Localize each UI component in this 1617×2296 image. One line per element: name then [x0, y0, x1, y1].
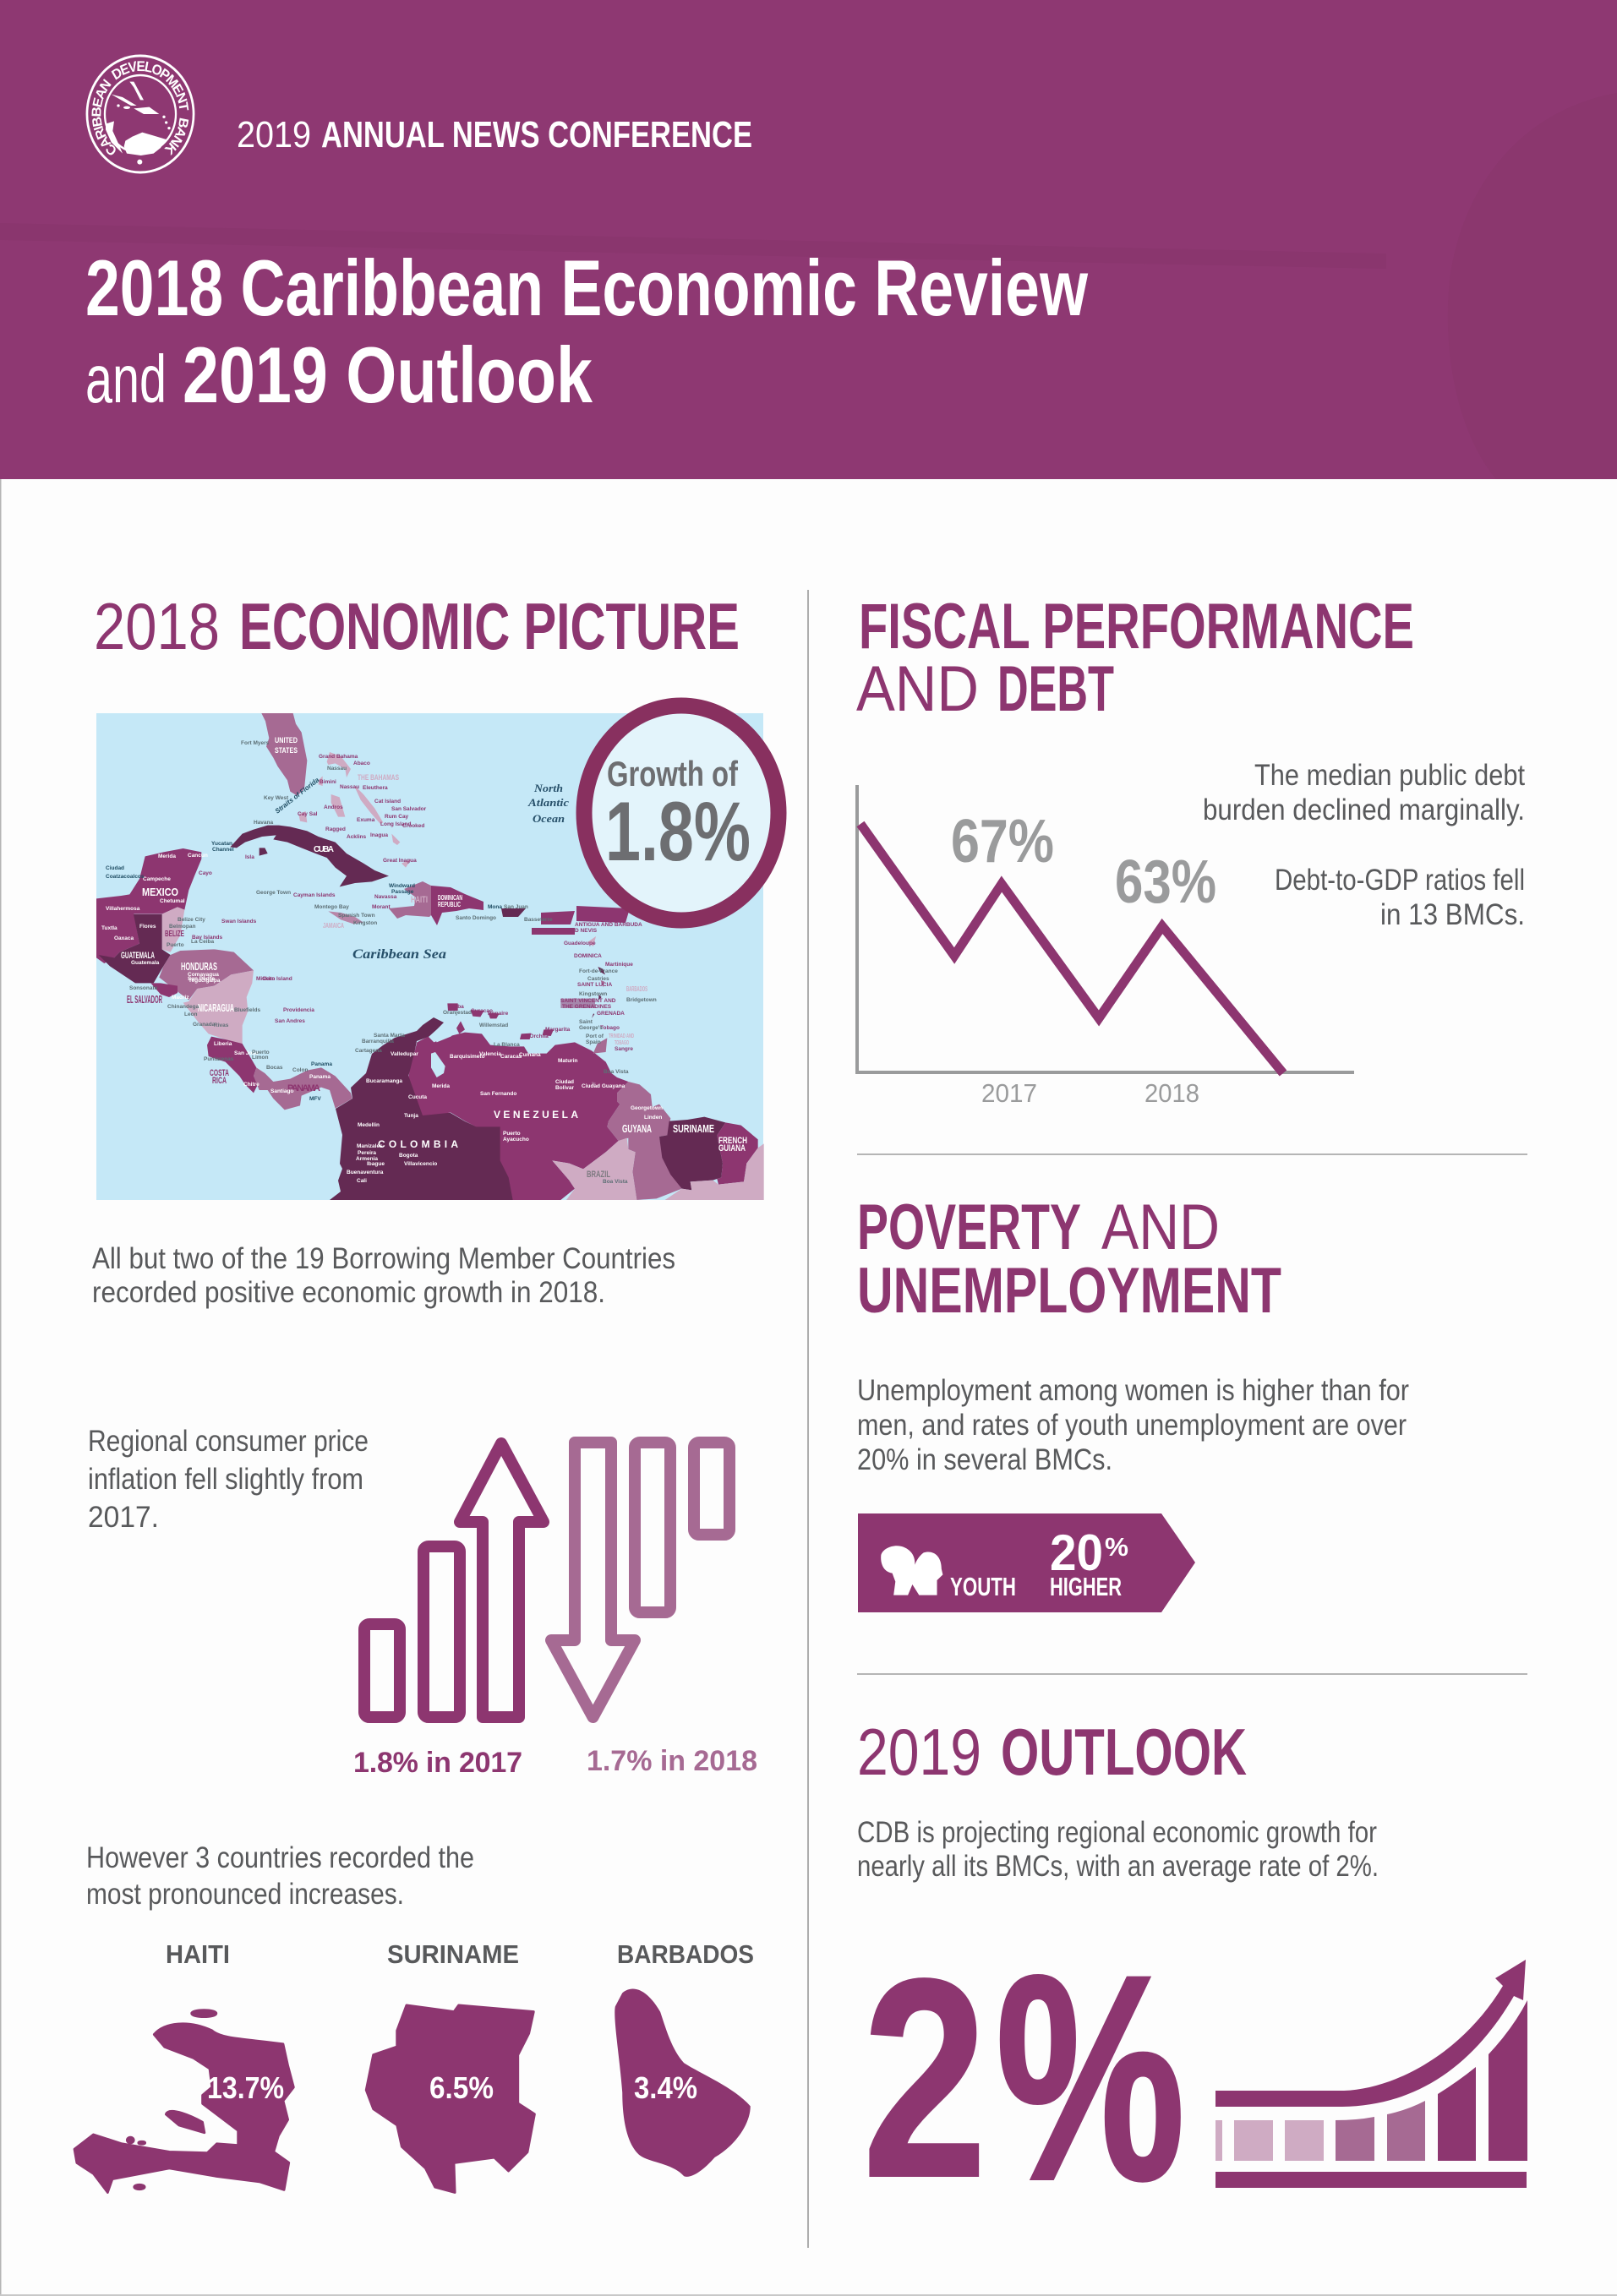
heading: fiscal performance and debt: [856, 591, 1414, 725]
map labels: countries: MEXICO: [142, 886, 178, 898]
map labels: cities and small islands: Pereira: [358, 1150, 376, 1156]
map labels: cities and small islands: Georgetown: [631, 1105, 663, 1111]
heading: poverty and unemployment: POVERTY: [857, 1192, 1081, 1263]
map labels: cities and small islands: Liberia: [214, 1041, 232, 1047]
map labels: cities and small islands: Bluefields: [234, 1007, 260, 1013]
map labels: cities and small islands: Ayacucho: [503, 1137, 529, 1143]
map labels: cities and small islands: Rivas: [214, 1023, 229, 1028]
map land: Colombia: [330, 1017, 513, 1200]
map labels: countries: GUYANA: [622, 1122, 652, 1135]
map labels: countries: FRENCH: [718, 1136, 747, 1146]
map labels: cities and small islands: Crooked: [402, 823, 424, 829]
heading: poverty and unemployment: UNEMPLOYMENT: [857, 1255, 1281, 1327]
map labels: cities and small islands: Margarita: [545, 1027, 571, 1033]
map labels: countries: COLOMBIA: [378, 1138, 458, 1150]
panel: Barbados: 3.4%: [634, 2070, 697, 2105]
map labels: cities and small islands: Guadeloupe: [564, 941, 596, 946]
map labels: cities and small islands: Tegucigalpa: [188, 978, 221, 984]
text: median debt: burden declined marginally.: [1203, 794, 1525, 826]
header kicker: [237, 114, 752, 155]
map labels: cities and small islands: Montego Bay: [314, 904, 349, 910]
map labels: cities and small islands: Yucatan: [211, 841, 232, 847]
map labels: countries: BELIZE: [165, 930, 184, 939]
map labels: cities and small islands: Curacao: [471, 1008, 493, 1014]
map labels: cities and small islands: THE GRENADINES: [562, 1004, 612, 1010]
text: unemployment: [857, 1374, 1409, 1476]
map labels: cities and small islands: ANTIGUA AND BARBUDA: [575, 922, 642, 928]
map labels: cities and small islands: Puerto: [167, 942, 184, 948]
map labels: cities and small islands: Rum Cay: [385, 814, 409, 820]
map labels: cities and small islands: Puntarenas: [204, 1056, 234, 1062]
map labels: countries: RICA: [212, 1076, 227, 1086]
map labels: cities and small islands: Belize City: [178, 917, 205, 923]
text: CDB projection: CDB is projecting regional economic growth for: [857, 1816, 1377, 1849]
map labels: cities and small islands: Boa Vista: [603, 1179, 628, 1185]
heading: 2019 outlook: 2019: [857, 1715, 981, 1789]
text: inflation: 2017.: [88, 1501, 159, 1534]
text: CDB projection: [857, 1816, 1379, 1883]
map labels: cities and small islands: Santo Domingo: [456, 915, 496, 921]
map labels: cities and small islands: Navassa: [374, 894, 397, 900]
panel: Suriname: SURINAME: [387, 1939, 519, 1969]
map labels: cities and small islands: Madriz: [172, 995, 189, 1001]
map labels: cities and small islands: Cay Sal: [298, 811, 318, 817]
map labels: countries: REPUBLIC: [438, 901, 461, 908]
map labels: cities and small islands: Key West: [264, 795, 289, 801]
big number: 2%: [862, 1916, 1185, 2241]
map labels: cities and small islands: Bonaire: [488, 1011, 509, 1017]
map labels: cities and small islands: Manizales: [357, 1143, 383, 1149]
label: 1.8% in 2017: 1.8% in 2017: [353, 1747, 522, 1779]
map labels: cities and small islands: Long Island: [380, 821, 411, 827]
map labels: cities and small islands: Bocas: [266, 1065, 283, 1071]
map labels: cities and small islands: [101, 740, 663, 1185]
map labels: cities and small islands: Barranquilla: [362, 1039, 394, 1044]
panel: Haiti: HAITI: [166, 1939, 230, 1969]
map labels: seas: North: [533, 783, 563, 794]
heading: fiscal performance and debt: AND: [856, 653, 979, 725]
map labels: cities and small islands: Tuxtla: [101, 925, 117, 931]
heading: poverty and unemployment: [857, 1192, 1281, 1327]
axis label: 2018: 2018: [1144, 1078, 1199, 1108]
map labels: cities and small islands: Leon: [184, 1012, 198, 1017]
map labels: cities and small islands: Sangre: [615, 1046, 633, 1052]
text: unemployment: men, and rates of youth unemployment are over: [857, 1409, 1407, 1442]
map labels: cities and small islands: Spanish Town: [338, 913, 375, 919]
map labels: cities and small islands: Cali: [357, 1178, 367, 1184]
panel: Haiti: 13.7%: [207, 2070, 284, 2105]
text: positive growth: recorded positive economic growth in 2018.: [92, 1276, 605, 1309]
map labels: cities and small islands: Ciudad Guayana: [582, 1083, 625, 1089]
map labels: cities and small islands: Kingstown: [579, 991, 607, 997]
map labels: countries: TOBAGO: [615, 1040, 629, 1046]
map labels: countries: HONDURAS: [181, 960, 217, 973]
label: 1.7% in 2018: 1.7% in 2018: [587, 1745, 757, 1777]
map labels: cities and small islands: Nassau: [327, 766, 347, 772]
data label: 67%: 67%: [951, 808, 1054, 875]
big number: 2%: %: [996, 1916, 1185, 2241]
map labels: cities and small islands: Nassau: [340, 784, 359, 790]
map land: Hispaniola and Antilles: [389, 881, 630, 946]
map labels: cities and small islands: Port of: [586, 1033, 604, 1039]
text: median debt: in 13 BMCs.: [1380, 898, 1525, 931]
map labels: cities and small islands: Villahermosa: [106, 906, 140, 912]
map labels: cities and small islands: Caracas: [500, 1054, 522, 1060]
map labels: cities and small islands: Fort-de-France: [579, 968, 618, 974]
heading: 2019 outlook: [857, 1715, 1247, 1789]
map labels: cities and small islands: Colon: [292, 1067, 308, 1073]
map labels: countries: NICARAGUA: [198, 1001, 234, 1014]
icon: two youth silhouettes: [881, 1546, 942, 1595]
map labels: cities and small islands: Mona: [488, 904, 502, 910]
map labels: cities and small islands: Exuma: [357, 817, 375, 823]
panel: Haiti: [74, 1939, 293, 2192]
map labels: cities and small islands: Swan Islands: [221, 919, 257, 924]
map labels: cities and small islands: Abaco: [353, 761, 370, 766]
map labels: cities and small islands: Bimini: [320, 779, 336, 785]
text: median debt: The median public debt: [1254, 759, 1525, 792]
value: 20%: 20: [1050, 1524, 1103, 1581]
map labels: cities and small islands: Flores: [139, 924, 156, 930]
map labels: cities and small islands: Passage: [391, 889, 414, 895]
text: median debt: Debt-to-GDP ratios fell: [1275, 864, 1525, 897]
map labels: cities and small islands: Cayo: [199, 870, 212, 876]
map labels: cities and small islands: Great Inagua: [383, 858, 417, 864]
map labels: cities and small islands: Villavicencio: [404, 1161, 437, 1167]
icon: falling bars and down arrow: [551, 1442, 729, 1717]
map labels: seas: Atlantic: [527, 797, 570, 809]
map labels: cities and small islands: Buenaventura: [347, 1170, 384, 1175]
map labels: countries: SURINAME: [673, 1122, 714, 1135]
map labels: countries: VENEZUELA: [494, 1109, 578, 1121]
map labels: countries: BRAZIL: [587, 1170, 610, 1180]
map labels: cities and small islands: Eleuthera: [363, 785, 388, 791]
callout: growth of 1.8%: 1.8%: [605, 784, 751, 878]
map labels: cities and small islands: MFV: [309, 1096, 321, 1102]
map labels: cities and small islands: Coatzacoalcos: [106, 874, 145, 880]
panel: header banner: [0, 0, 1617, 479]
map labels: cities and small islands: San Fernando: [480, 1091, 516, 1097]
map labels: cities and small islands: Linden: [644, 1115, 662, 1121]
callout: youth 20% higher: [858, 1513, 1195, 1612]
map labels: cities and small islands: Limon: [252, 1055, 269, 1061]
map labels: cities and small islands: Isla: [245, 854, 254, 860]
heading: fiscal performance and debt: DEBT: [997, 653, 1114, 725]
panel: Barbados: [615, 1939, 754, 2177]
data label: 63%: 63%: [1115, 848, 1216, 916]
map labels: cities and small islands: Maturin: [558, 1058, 578, 1064]
map labels: cities and small islands: Bay Islands: [192, 935, 223, 941]
map labels: cities and small islands: Saint: [579, 1019, 593, 1025]
map labels: cities and small islands: Acklins: [347, 834, 367, 840]
title: 2019 Outlook: [183, 330, 593, 419]
text: pronounced increases: [86, 1841, 474, 1911]
map labels: cities and small islands: Sonsonate: [129, 985, 158, 991]
map labels: cities and small islands: Oaxaca: [114, 935, 134, 941]
panel: Suriname: [366, 1939, 534, 2192]
map labels: cities and small islands: Medellin: [358, 1122, 380, 1128]
map labels: cities and small islands: Granada: [193, 1022, 216, 1028]
map labels: countries: DOMINICAN: [438, 894, 462, 902]
map labels: cities and small islands: Panama: [309, 1074, 331, 1080]
map labels: countries: EL SALVADOR: [127, 993, 162, 1006]
map labels: cities and small islands: Oranjestad: [443, 1010, 472, 1016]
map labels: cities and small islands: SAINT KITTS AND NEVIS: [532, 928, 598, 934]
map labels: cities and small islands: Merida: [432, 1083, 450, 1089]
map labels: cities and small islands: Puerto: [252, 1050, 270, 1055]
map labels: countries: [121, 736, 747, 1180]
map labels: cities and small islands: Inagua: [370, 832, 388, 838]
map labels: countries: PANAMA: [287, 1083, 320, 1093]
text: unemployment: 20% in several BMCs.: [857, 1443, 1112, 1476]
map labels: cities and small islands: Bucaramanga: [366, 1078, 402, 1084]
map labels: cities and small islands: SAINT VINCENT AND: [560, 998, 616, 1004]
title: [85, 243, 1089, 419]
map labels: cities and small islands: GRENADA: [597, 1011, 625, 1017]
map labels: seas: Caribbean Sea: [352, 947, 446, 962]
header kicker: 2019: [237, 114, 311, 155]
map labels: cities and small islands: Valledupar: [391, 1051, 418, 1057]
axis label: 2017: 2017: [981, 1078, 1037, 1108]
text: inflation: inflation fell slightly from: [88, 1463, 363, 1496]
label: higher: HIGHER: [1050, 1572, 1122, 1601]
panel: Caribbean map: [96, 713, 764, 1200]
text: positive growth: All but two of the 19 Borrowing Member Countries: [92, 1242, 675, 1275]
map labels: cities and small islands: La Blanca: [494, 1042, 520, 1048]
map labels: cities and small islands: Fort Myers: [241, 740, 270, 746]
map labels: cities and small islands: Andros: [324, 804, 343, 810]
map labels: countries: STATES: [275, 746, 298, 755]
map labels: cities and small islands: Straits of Florida: [274, 776, 321, 815]
map labels: cities and small islands: La Orchila: [522, 1033, 549, 1039]
map labels: countries: COSTA: [210, 1068, 229, 1078]
map labels: countries: UNITED: [275, 736, 298, 744]
map labels: cities and small islands: Campeche: [143, 876, 171, 882]
map labels: cities and small islands: Barquisimeto: [450, 1054, 485, 1060]
map labels: countries: CUBA: [314, 845, 334, 854]
map labels: cities and small islands: Morant: [372, 904, 391, 910]
map labels: cities and small islands: Guatemala: [131, 960, 160, 966]
map labels: cities and small islands: San Salvador: [391, 806, 427, 812]
map labels: cities and small islands: Merida: [158, 854, 176, 859]
icon: rising bars and up arrow: [364, 1443, 544, 1717]
title: 2018 Caribbean Economic Review: [85, 243, 1089, 332]
map labels: cities and small islands: Bridgetown: [626, 997, 657, 1003]
value: 20%: %: [1105, 1532, 1128, 1562]
map labels: cities and small islands: Channel: [212, 847, 234, 853]
map land: Central America: [99, 914, 352, 1110]
map labels: cities and small islands: San Andres: [275, 1018, 305, 1024]
heading: 2019 outlook: OUTLOOK: [1001, 1715, 1247, 1789]
map labels: cities and small islands: Tunja: [404, 1113, 418, 1119]
heading: poverty and unemployment: AND: [1101, 1192, 1220, 1263]
map labels: cities and small islands: Castries: [587, 976, 609, 982]
panel: Barbados: BARBADOS: [617, 1939, 754, 1969]
map labels: seas: Ocean: [533, 813, 565, 825]
map labels: cities and small islands: Willemstad: [479, 1023, 508, 1028]
map labels: cities and small islands: George's: [579, 1025, 603, 1031]
map labels: countries: THE BAHAMAS: [358, 773, 399, 782]
map labels: cities and small islands: Bolivar: [555, 1085, 575, 1091]
map labels: cities and small islands: Santa Marta: [374, 1033, 405, 1039]
map labels: countries: HAITI: [411, 895, 428, 905]
map labels: cities and small islands: Cancun: [188, 853, 208, 859]
heading: 2018 economic picture: 2018: [94, 589, 220, 663]
text: unemployment: Unemployment among women is higher than for: [857, 1374, 1409, 1407]
callout: growth of 1.8%: [584, 706, 778, 920]
map land: South America east: [408, 967, 764, 1200]
map labels: cities and small islands: Puerto: [503, 1131, 521, 1137]
map labels: cities and small islands: Panama: [311, 1061, 332, 1067]
map labels: countries: GUATEMALA: [121, 951, 155, 961]
map labels: cities and small islands: Cartagena: [355, 1048, 382, 1054]
map labels: cities and small islands: Cat Island: [374, 799, 401, 804]
map labels: cities and small islands: Ciudad: [555, 1079, 574, 1085]
map labels: cities and small islands: Tobago: [600, 1025, 620, 1031]
text: pronounced increases: However 3 countries recorded the: [86, 1841, 474, 1874]
map labels: cities and small islands: Miskito: [256, 976, 275, 982]
map labels: cities and small islands: Santiago: [270, 1088, 293, 1094]
map labels: cities and small islands: Kingston: [353, 920, 377, 926]
callout: growth of 1.8%: Growth of: [607, 754, 739, 794]
map labels: cities and small islands: San Juan: [504, 904, 528, 910]
map labels: cities and small islands: George Town: [256, 890, 291, 896]
map labels: cities and small islands: Chetumal: [160, 898, 185, 904]
map labels: cities and small islands: Valencia: [479, 1051, 501, 1057]
text: median debt: [1203, 759, 1525, 931]
map labels: cities and small islands: Boa Vista: [604, 1069, 629, 1075]
map labels: cities and small islands: Martinique: [605, 962, 633, 968]
title: and: [85, 341, 167, 417]
map labels: cities and small islands: San Jose: [234, 1050, 259, 1056]
chart: public debt line: [857, 785, 1354, 1108]
map labels: cities and small islands: SAINT LUCIA: [577, 982, 612, 988]
map labels: cities and small islands: Ragged: [325, 826, 346, 832]
map labels: cities and small islands: Grand Bahama: [319, 754, 358, 760]
map labels: cities and small islands: Bogota: [399, 1153, 418, 1159]
map labels: cities and small islands: Havana: [254, 820, 274, 826]
text: positive growth: [92, 1242, 675, 1309]
map labels: cities and small islands: Ibague: [367, 1161, 385, 1167]
map labels: countries: TRINIDAD AND: [609, 1033, 634, 1039]
map labels: cities and small islands: Comayagua: [188, 972, 219, 978]
map labels: seas: [352, 783, 570, 962]
map labels: cities and small islands: Armenia: [356, 1156, 378, 1162]
logo: Caribbean Development Bank seal: CARIBBEAN DEVELOPMENT BANK: [91, 61, 189, 155]
panel: Suriname: 6.5%: [429, 2070, 494, 2105]
map labels: cities and small islands: Ciudad: [106, 865, 124, 871]
map labels: cities and small islands: San Pedro: [188, 976, 215, 982]
big number: 2%: 2: [862, 1920, 987, 2236]
map labels: cities and small islands: Basseterre: [524, 917, 553, 923]
map labels: cities and small islands: Spain: [586, 1039, 601, 1045]
map labels: cities and small islands: Cucuta: [408, 1094, 427, 1100]
map labels: cities and small islands: Cumana: [519, 1052, 541, 1058]
text: inflation: [88, 1425, 369, 1534]
map labels: cities and small islands: Chitre: [243, 1082, 259, 1088]
map labels: countries: JAMAICA: [323, 922, 344, 930]
map labels: cities and small islands: Corn Island: [262, 976, 292, 982]
map labels: cities and small islands: Chinandega: [167, 1004, 199, 1010]
heading: 2018 economic picture: [94, 589, 740, 663]
map labels: cities and small islands: DOMINICA: [574, 953, 602, 959]
text: CDB projection: nearly all its BMCs, with an average rate of 2%.: [857, 1850, 1379, 1883]
heading: fiscal performance and debt: FISCAL PERFORMANCE: [859, 591, 1414, 663]
map labels: cities and small islands: La Ceiba: [191, 939, 214, 945]
map labels: cities and small islands: Providencia: [283, 1007, 314, 1013]
map labels: cities and small islands: Cayman Islands: [293, 892, 336, 898]
map labels: cities and small islands: Windward: [389, 883, 415, 889]
text: inflation: Regional consumer price: [88, 1425, 369, 1458]
map labels: cities and small islands: Belmopan: [169, 924, 195, 930]
map land: northern Caribbean and Mexico: [96, 713, 412, 963]
header kicker: ANNUAL NEWS CONFERENCE: [321, 114, 752, 155]
text: pronounced increases: most pronounced increases.: [86, 1878, 404, 1911]
map labels: countries: BARBADOS: [626, 985, 647, 993]
chart: growth bars and rising arrow: [1215, 1960, 1527, 2188]
map labels: cities and small islands: Aruba: [448, 1004, 464, 1010]
label: youth: YOUTH: [950, 1572, 1016, 1601]
map labels: countries: GUIANA: [718, 1143, 746, 1153]
heading: 2018 economic picture: ECONOMIC PICTURE: [239, 589, 740, 663]
